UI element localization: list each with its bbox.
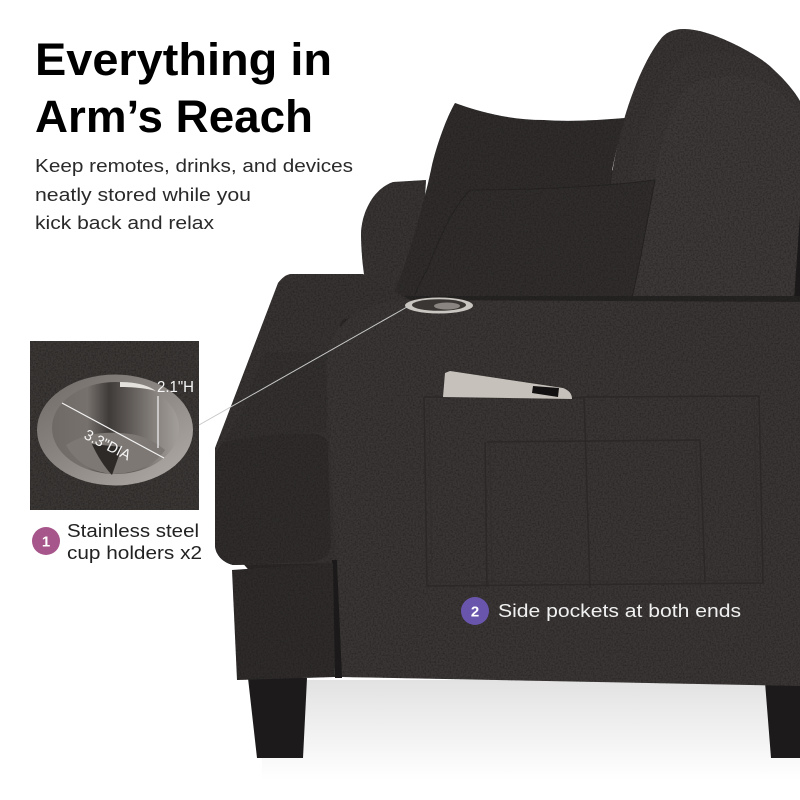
sofa back cushion, front [632,76,800,300]
left leg [248,678,307,758]
callout 2: side pockets [461,597,741,625]
bowl floor [66,433,165,474]
diameter label: 3.3"DIA [81,426,133,464]
back cushion dark edge [794,215,800,300]
dark wedge [92,444,122,475]
floor shadow [262,680,800,780]
inset: cup holder close-up [30,341,199,510]
steel bowl [52,382,179,474]
callout 1 text [67,521,202,563]
sofa upholstery [215,29,800,686]
sofa back cushion, rear [611,29,800,300]
description [35,156,353,233]
steel rim [37,374,193,486]
callout 2 text: Side pockets at both ends [498,601,741,621]
front panel face [215,433,331,565]
title: Everything in [35,34,332,85]
remote control in pocket [443,371,572,399]
badge 2: 2 [471,604,479,620]
gap shadow [332,560,342,678]
far armrest [361,180,426,298]
base silhouette fill [240,170,800,680]
sofa legs [248,678,800,758]
badge 2 [461,597,489,625]
callout 1 text: cup holders x2 [67,543,202,563]
badge 1 [32,527,60,555]
cup holder on arm [405,298,473,314]
side pocket stitching [424,396,763,588]
right leg [765,682,800,758]
seat cushion and front panel [215,274,410,565]
description: neatly stored while you [35,185,251,205]
title: Arm’s Reach [35,91,313,142]
diameter line [62,403,164,458]
height line [157,396,159,448]
callout 1: cup holders [32,521,202,563]
seat lower section [222,352,330,443]
title [35,34,332,142]
bowl top highlight [120,382,156,391]
remote display [532,386,559,397]
height label: 2.1"H [157,379,194,396]
description: Keep remotes, drinks, and devices [35,156,353,176]
connector line [199,307,407,425]
description: kick back and relax [35,213,214,233]
near arm body [326,300,800,686]
shadow behind arm [400,296,800,303]
callout 1 text: Stainless steel [67,521,199,541]
badge 1: 1 [42,534,50,550]
rear throw pillow [393,103,625,297]
front throw pillow [414,180,655,298]
lower base panel [232,563,335,680]
back cushion seam [625,52,800,300]
